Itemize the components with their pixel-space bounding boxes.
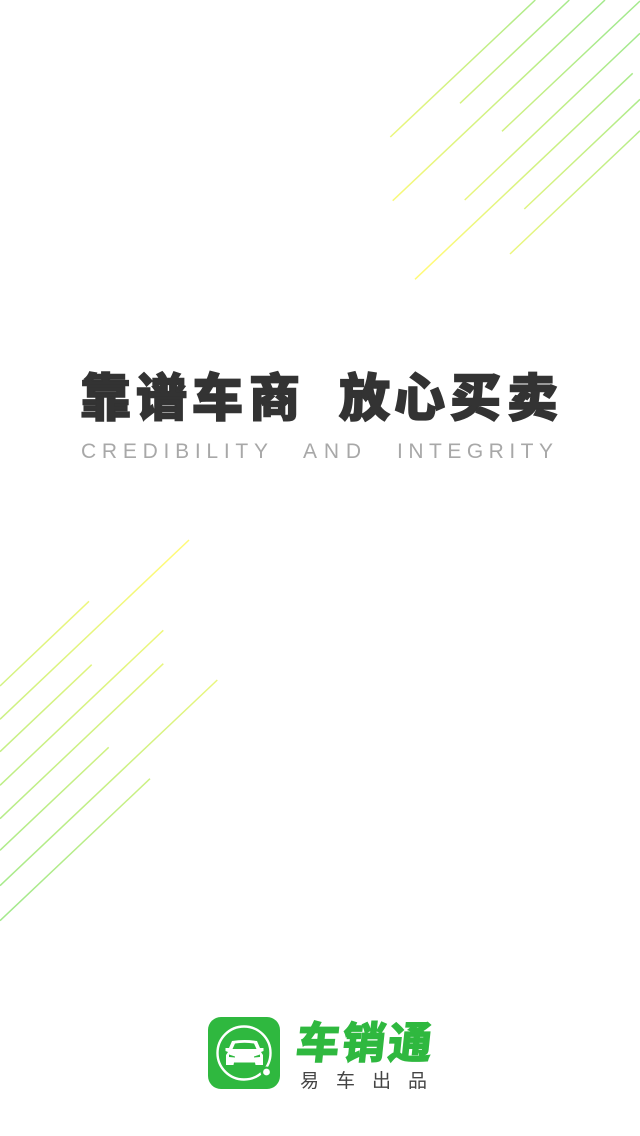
logo tagline: 易车出品 — [300, 1070, 427, 1092]
decorative lines: bottom left — [0, 540, 217, 921]
subtitle: English slogan — [81, 440, 553, 463]
logo wordmark: 车销通 — [294, 1020, 434, 1068]
decorative lines: top right — [390, 0, 640, 279]
icon: app logo with car — [208, 1017, 280, 1089]
subtitle: English slogan: CREDIBILITY — [81, 440, 268, 463]
subtitle: English slogan: INTEGRITY — [397, 440, 553, 463]
title: Chinese slogan: 靠谱车商放心买卖 — [80, 370, 558, 427]
subtitle: English slogan: AND — [303, 440, 361, 463]
